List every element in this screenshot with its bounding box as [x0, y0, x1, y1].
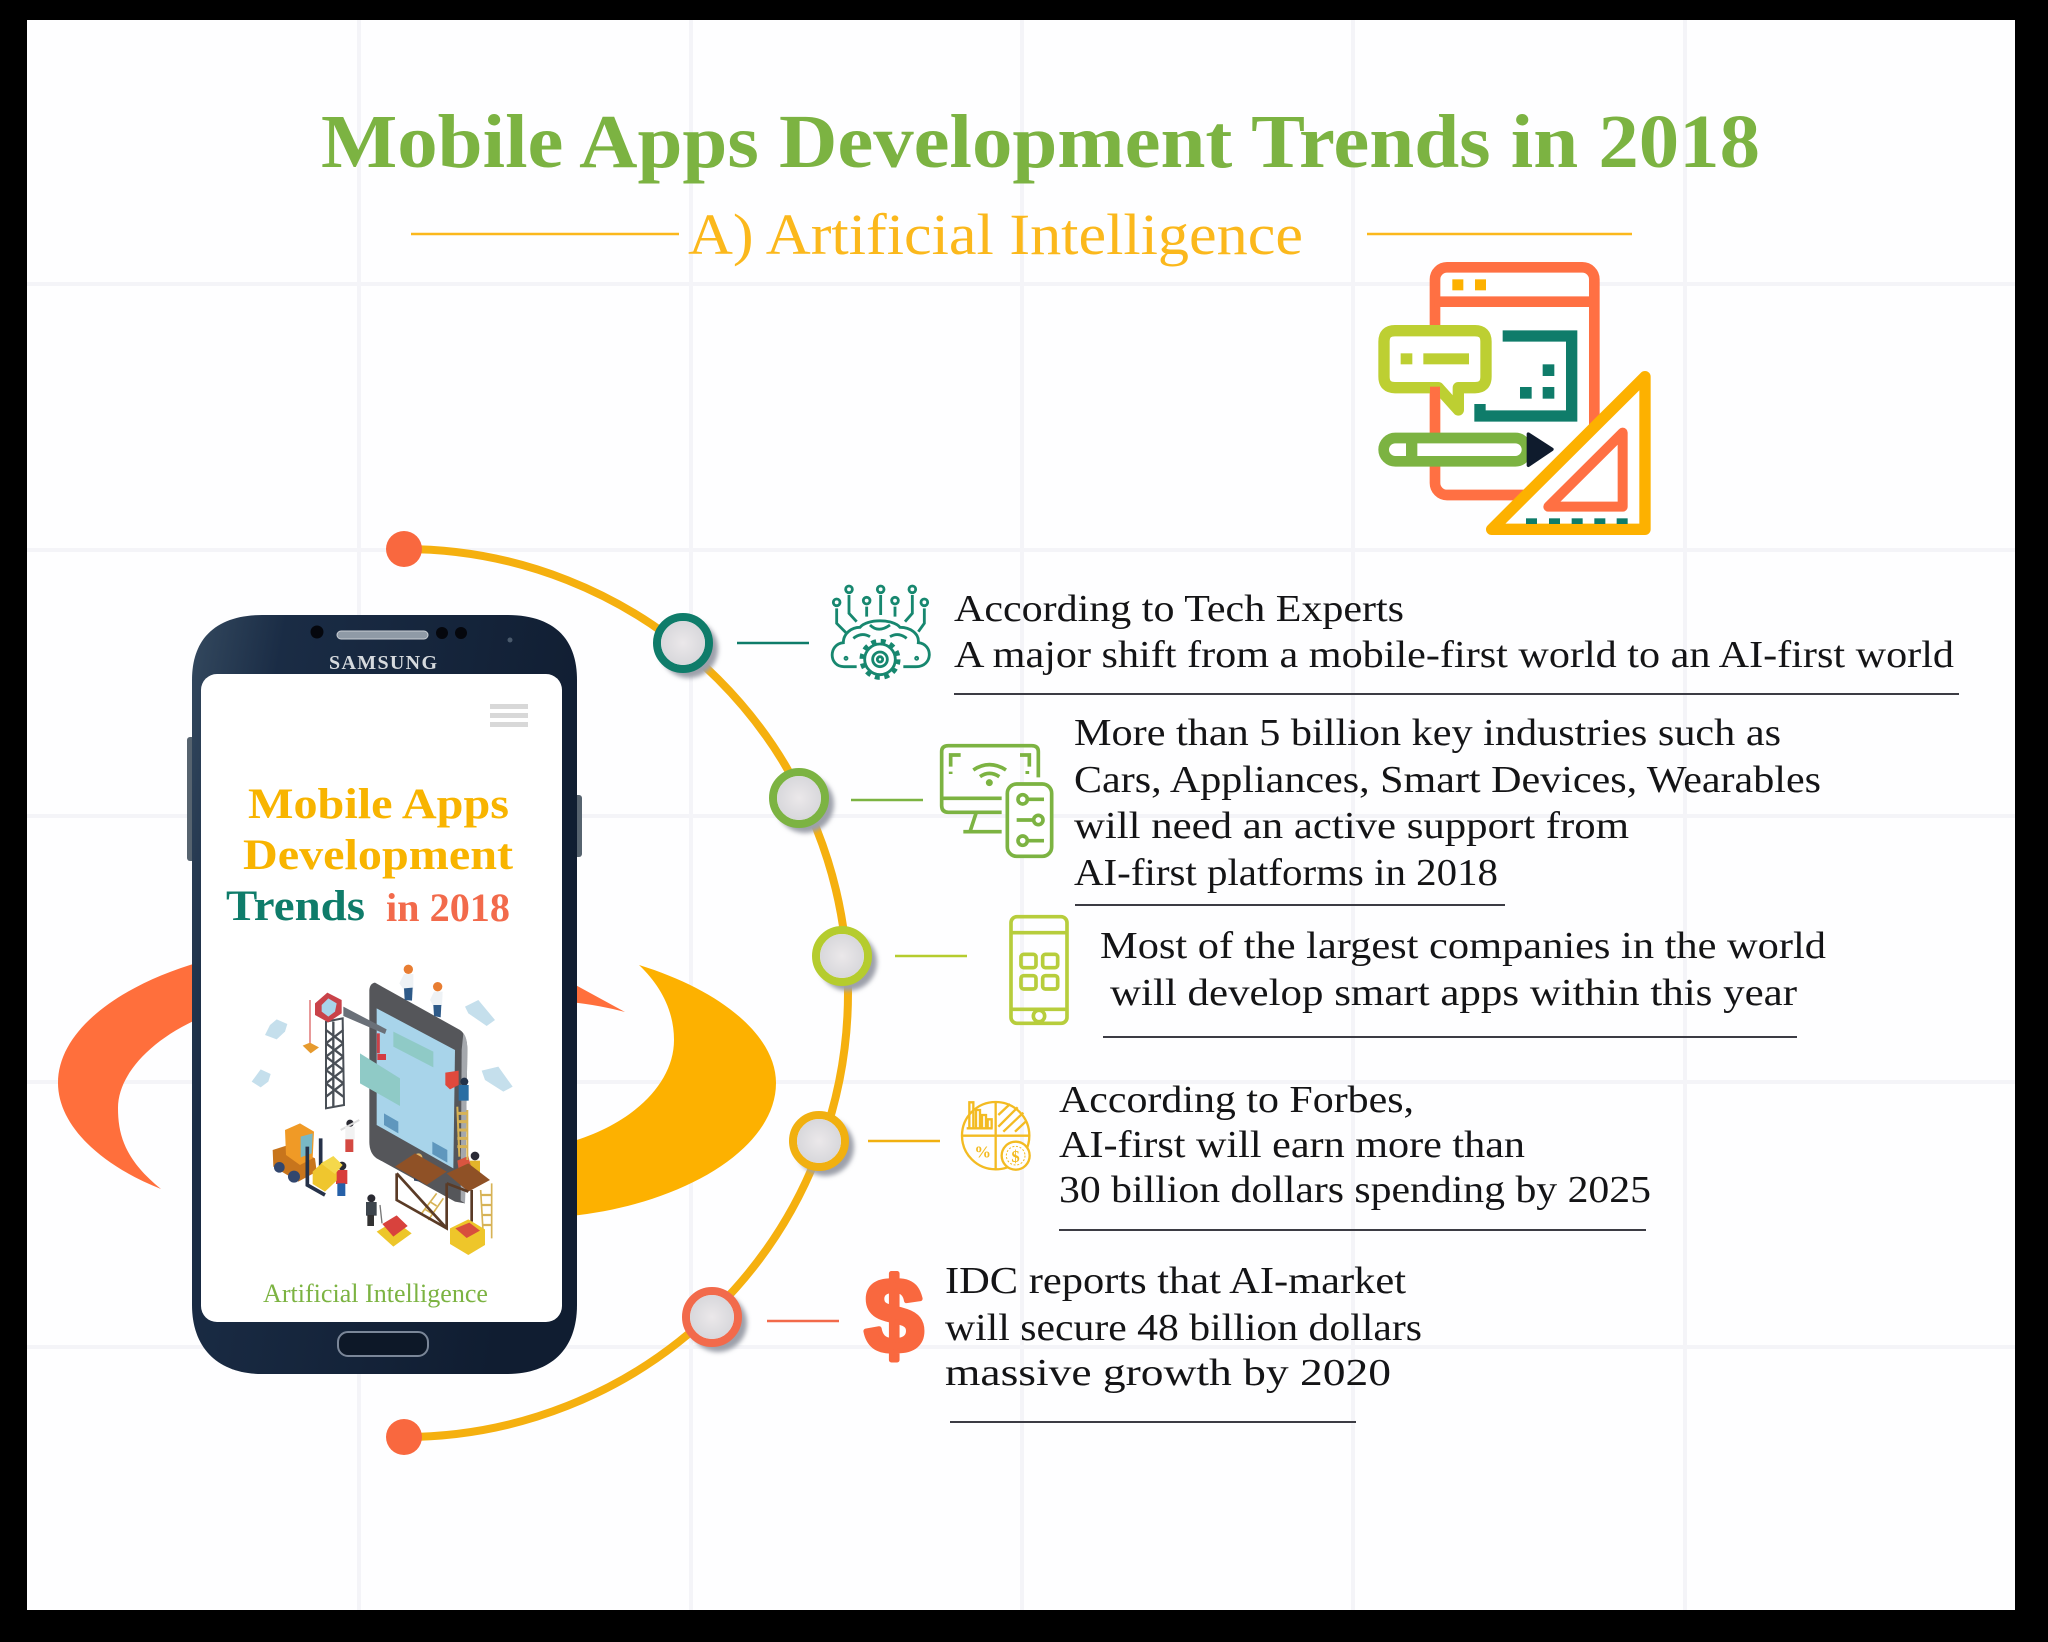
hamburger menu — [490, 704, 528, 727]
text 5: massive growth by 2020 — [945, 1352, 1391, 1394]
text 4 — [1059, 1079, 1651, 1211]
text 2 — [1074, 712, 1821, 894]
forklift — [273, 1123, 343, 1195]
item 4 — [793, 1079, 1651, 1230]
text 3: will develop smart apps within this year — [1110, 972, 1797, 1014]
phone speaker and camera — [310, 626, 512, 642]
yellow ladders — [422, 1107, 492, 1238]
node 3 — [816, 930, 877, 991]
text 3: Most of the largest companies in the world — [1100, 925, 1826, 967]
title: Mobile Apps Development Trends in 2018 — [321, 100, 1760, 184]
text 5: will secure 48 billion dollars — [945, 1307, 1422, 1349]
icon: smartphone apps — [1011, 917, 1067, 1023]
item 2 — [773, 712, 1821, 905]
item 3 — [816, 917, 1826, 1037]
icon: pie chart with dollar: $ — [1011, 1147, 1020, 1166]
text 4: 30 billion dollars spending by 2025 — [1059, 1169, 1651, 1211]
icon: pie chart with dollar: % — [974, 1142, 991, 1161]
icon: dollar sign: $ — [865, 1257, 923, 1375]
subtitle: A) Artificial Intelligence: A) Artificial Intelligence — [688, 202, 1303, 267]
cart and crate — [377, 1205, 485, 1255]
text 2: More than 5 billion key industries such as — [1074, 712, 1781, 754]
phone heading: in 2018 — [386, 885, 510, 930]
text 2: will need an active support from — [1074, 805, 1629, 847]
icon: pie chart with dollar — [962, 1102, 1030, 1170]
node 2 — [773, 772, 834, 833]
item 5 — [686, 1257, 1422, 1422]
phone heading — [226, 781, 514, 930]
phone brand: SAMSUNG — [329, 652, 437, 674]
timeline arc — [386, 531, 848, 1455]
text 2: AI-first platforms in 2018 — [1074, 852, 1498, 894]
phone heading: Development — [243, 832, 514, 879]
phone heading: Trends — [226, 883, 365, 930]
icon: app design tools — [1384, 267, 1645, 529]
node 4 — [793, 1115, 854, 1176]
phone caption: Artificial Intelligence — [263, 1279, 488, 1308]
workers — [336, 965, 480, 1226]
text 2: Cars, Appliances, Smart Devices, Wearables — [1074, 759, 1821, 801]
swoosh: orange crescent — [570, 965, 776, 1216]
node 1 — [657, 617, 718, 678]
icon: monitor and remote — [942, 746, 1052, 856]
text 5: IDC reports that AI-market — [945, 1260, 1406, 1302]
text 1: According to Tech Experts — [954, 588, 1404, 630]
text 4: According to Forbes, — [1059, 1079, 1414, 1121]
text 3 — [1100, 925, 1826, 1014]
device — [369, 983, 467, 1203]
crane — [303, 993, 387, 1108]
phone screen — [201, 674, 562, 1322]
icon: AI brain and gear — [832, 586, 929, 678]
text 4: AI-first will earn more than — [1059, 1124, 1525, 1166]
isometric construction illustration — [252, 965, 513, 1255]
item 1 — [657, 586, 1959, 694]
text 1: A major shift from a mobile-first world to an AI-first world — [954, 634, 1954, 676]
smartphone — [187, 615, 582, 1374]
swoosh: red crescent — [58, 962, 625, 1189]
home button — [338, 1332, 428, 1356]
phone heading: Mobile Apps — [248, 781, 509, 828]
scaffold — [395, 1153, 490, 1228]
text 1 — [954, 588, 1954, 676]
clouds — [252, 1000, 513, 1092]
text 5 — [945, 1260, 1422, 1394]
node 5 — [686, 1291, 747, 1352]
